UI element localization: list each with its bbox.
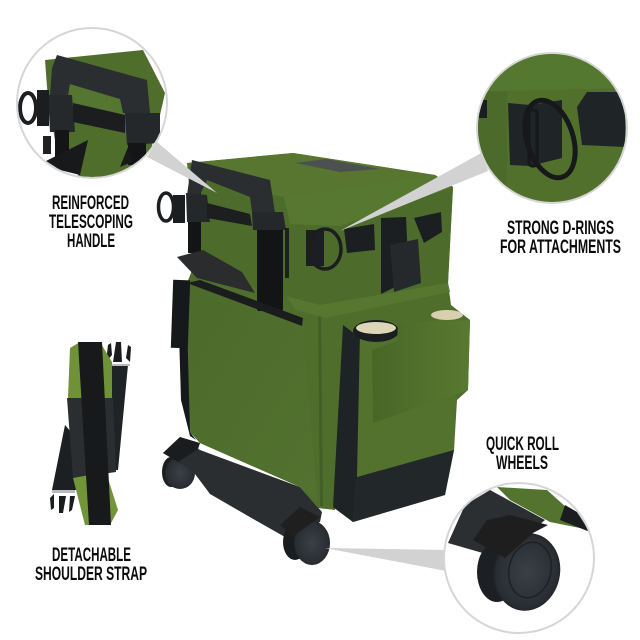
right panel xyxy=(357,318,456,477)
black gusset xyxy=(333,325,367,522)
telescoping rods xyxy=(188,193,283,311)
zipper pull xyxy=(285,228,289,278)
inset circle: D-rings xyxy=(477,53,630,206)
inset circle: handle xyxy=(17,28,167,178)
upper body xyxy=(196,175,453,305)
callout wedge: wheel xyxy=(325,548,447,571)
label: handle: REINFORCED xyxy=(52,192,129,214)
cup holders xyxy=(353,310,463,342)
side pocket flap xyxy=(372,320,470,423)
bag silhouette xyxy=(178,153,470,522)
side buckle strap xyxy=(171,280,190,348)
inset circle: wheels xyxy=(444,483,594,633)
bag left pocket xyxy=(182,283,320,503)
handle D-ring xyxy=(158,193,174,221)
lid top xyxy=(187,153,435,197)
bag center column xyxy=(296,300,345,510)
wheel base frame xyxy=(162,437,330,565)
label: strap: DETACHABLE xyxy=(52,544,131,566)
label: D-rings xyxy=(500,217,621,258)
main product: rolling bag xyxy=(158,153,470,565)
D-ring on body xyxy=(306,229,341,269)
pocket opening xyxy=(187,280,303,326)
seam xyxy=(318,308,323,506)
bottom black panel xyxy=(353,450,454,522)
inset: shoulder strap xyxy=(50,342,131,525)
label: strap xyxy=(35,544,147,585)
strap buckle top xyxy=(106,342,131,366)
label: handle xyxy=(49,192,133,252)
handle xyxy=(186,160,286,230)
tray xyxy=(177,250,255,293)
label: handle: HANDLE xyxy=(67,230,115,252)
label: strap: SHOULDER STRAP xyxy=(35,563,147,585)
callout wedge: D-rings xyxy=(340,152,488,231)
webbing loops and buckle xyxy=(344,212,442,294)
label: wheels: WHEELS xyxy=(496,452,548,474)
label: wheels xyxy=(486,433,559,474)
callout wedge: handle xyxy=(147,142,217,193)
label: wheels: QUICK ROLL xyxy=(486,433,559,455)
lid label xyxy=(295,159,380,172)
strap buckle bottom xyxy=(50,490,75,513)
label: handle: TELESCOPING xyxy=(49,211,133,233)
